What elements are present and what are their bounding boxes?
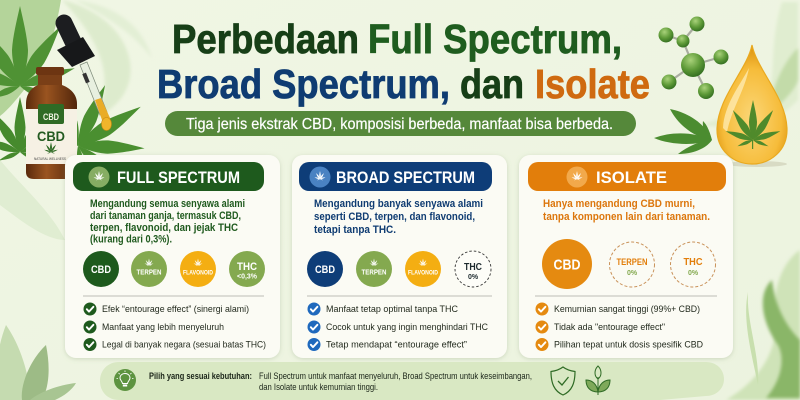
broad spectrum header <box>299 162 492 191</box>
isolate header: ISOLATE <box>596 168 667 187</box>
composition circles: THC <box>464 261 482 273</box>
callout text: dan Isolate untuk kemurnian tinggi. <box>259 382 378 393</box>
full spectrum header: FULL SPECTRUM <box>117 168 240 187</box>
composition circles: FLAVONOID <box>408 270 439 276</box>
full spectrum description: (kurang dari 0,3%). <box>90 234 172 246</box>
benefit list <box>308 302 488 351</box>
composition circles: CBD <box>91 264 111 276</box>
icon: light bulb <box>114 369 136 391</box>
composition circles <box>83 251 265 287</box>
composition circles: CBD <box>315 264 335 276</box>
icon: shield <box>551 367 575 395</box>
title: Isolate <box>535 61 650 107</box>
benefit list: Legal di banyak negara (sesuai batas THC) <box>102 340 266 350</box>
composition circles: TERPEN <box>136 270 162 276</box>
panel: isolate <box>519 155 733 358</box>
callout text <box>149 371 532 393</box>
composition circles <box>307 251 491 287</box>
isolate description: Hanya mengandung CBD murni, <box>543 198 695 210</box>
icon: oil drop with leaf <box>717 45 787 167</box>
CBD bottle <box>26 67 77 179</box>
full spectrum description: Mengandung semua senyawa alami <box>90 198 245 210</box>
broad spectrum description <box>314 198 483 236</box>
broad spectrum header: BROAD SPECTRUM <box>336 168 475 187</box>
composition circles: <0,3% <box>237 274 258 280</box>
composition circles <box>542 239 716 289</box>
benefit list: Tetap mendapat “entourage effect” <box>326 340 467 350</box>
subtitle pill <box>165 111 636 136</box>
composition circles: FLAVONOID <box>183 270 214 276</box>
full spectrum description <box>90 198 245 246</box>
bottle label tag: CBD <box>43 112 59 122</box>
isolate header <box>528 162 726 191</box>
composition circles: TERPEN <box>362 270 386 276</box>
panel: broad spectrum <box>292 155 507 358</box>
bottle label text: CBD <box>37 128 65 144</box>
title: Perbedaan <box>172 16 359 62</box>
title: Broad Spectrum, <box>157 61 450 107</box>
broad spectrum description: tetapi tanpa THC. <box>314 224 396 236</box>
icon: plant <box>586 366 610 395</box>
benefit list: Manfaat tetap optimal tanpa THC <box>326 304 458 315</box>
benefit list: Tidak ada "entourage effect" <box>554 322 665 333</box>
bottle label text <box>34 128 67 161</box>
benefit list: Kemurnian sangat tinggi (99%+ CBD) <box>554 304 700 315</box>
benefit list: Manfaat yang lebih menyeluruh <box>102 322 224 333</box>
bottom callout bar <box>100 362 724 400</box>
callout text: Pilih yang sesuai kebutuhan: <box>149 371 252 382</box>
title <box>157 16 650 107</box>
composition circles: THC <box>684 256 703 268</box>
isolate description: tanpa komponen lain dari tanaman. <box>543 211 710 223</box>
title: dan <box>460 61 524 107</box>
full spectrum header <box>73 162 264 191</box>
composition circles: TERPEN <box>616 257 648 267</box>
callout text: Full Spectrum untuk manfaat menyeluruh, Broad Spectrum untuk keseimbangan, <box>259 371 532 382</box>
composition circles: THC <box>237 261 257 273</box>
panel: full spectrum <box>65 155 280 358</box>
cannabis leaves behind the bottle <box>0 6 168 198</box>
dropper <box>57 23 112 130</box>
title: Full Spectrum, <box>368 16 622 62</box>
faded leaf bottom left <box>0 325 76 400</box>
full spectrum description: terpen, flavonoid, dan jejak THC <box>90 222 238 234</box>
broad spectrum description: seperti CBD, terpen, dan flavonoid, <box>314 211 475 223</box>
broad spectrum description: Mengandung banyak senyawa alami <box>314 198 483 210</box>
subtitle pill: Tiga jenis ekstrak CBD, komposisi berbeda, manfaat bisa berbeda. <box>186 116 613 133</box>
composition circles: CBD <box>554 256 581 274</box>
benefit list <box>536 302 703 351</box>
benefit list <box>84 302 266 351</box>
benefit list: Pilihan tepat untuk dosis spesifik CBD <box>554 340 703 350</box>
small leaf beside drop <box>654 109 712 154</box>
isolate description <box>543 198 710 223</box>
composition circles: 0% <box>468 274 479 281</box>
full spectrum description: dari tanaman ganja, termasuk CBD, <box>90 210 241 222</box>
composition circles: 0% <box>627 270 638 277</box>
benefit list: Cocok untuk yang ingin menghindari THC <box>326 322 488 333</box>
benefit list: Efek “entourage effect” (sinergi alami) <box>102 304 249 315</box>
composition circles: 0% <box>688 270 699 277</box>
bottle label text: NATURAL WELLNESS <box>34 157 67 161</box>
icon: molecule <box>658 16 728 99</box>
